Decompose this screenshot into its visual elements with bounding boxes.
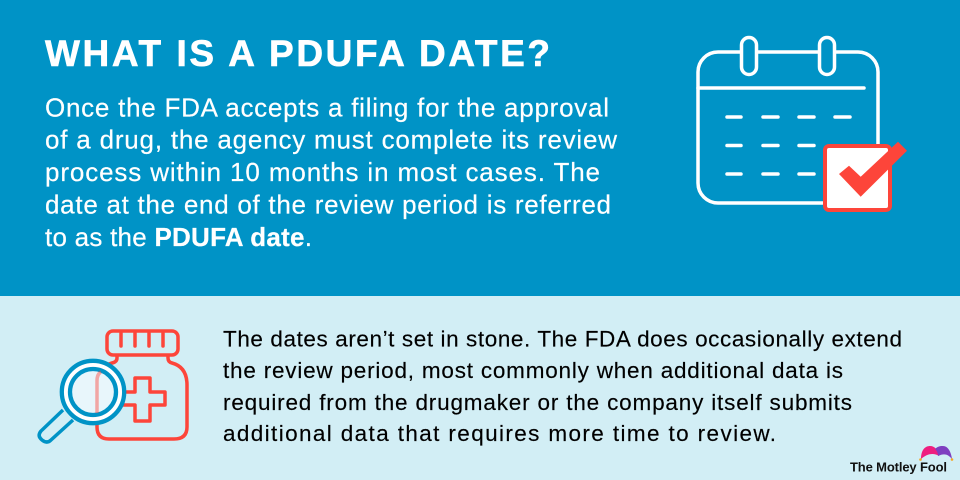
- title: WHAT IS A PDUFA DATE?: [45, 33, 550, 74]
- text block: dates can be extended: required from the drugmaker or the company itself submits: [223, 390, 852, 415]
- text block: definition: of a drug, the agency must complete its review: [45, 124, 617, 154]
- panel: bottom light background: [0, 296, 960, 480]
- text block: definition: Once the FDA accepts a filing for the approval: [45, 92, 609, 122]
- panel: top blue background: [0, 0, 960, 296]
- text block: definition: date at the end of the review period is referred: [45, 190, 611, 220]
- text block: dates can be extended: the review period, most commonly when additional data is: [223, 358, 843, 383]
- text block: dates can be extended: additional data that requires more time to review.: [223, 421, 776, 446]
- text block: definition: [45, 92, 617, 252]
- logo: The Motley Fool: The Motley Fool: [850, 460, 947, 474]
- text block: dates can be extended: The dates aren’t set in stone. The FDA does occasionally extend: [223, 326, 902, 352]
- text block: definition: to as the PDUFA date.: [45, 222, 312, 252]
- icon: calendar with check mark: [698, 38, 907, 210]
- logo: The Motley Fool: [850, 446, 953, 474]
- text block: definition: process within 10 months in most cases. The: [45, 157, 600, 187]
- icon: medicine bottle under magnifying glass: [39, 331, 187, 442]
- text block: dates can be extended: [223, 326, 902, 446]
